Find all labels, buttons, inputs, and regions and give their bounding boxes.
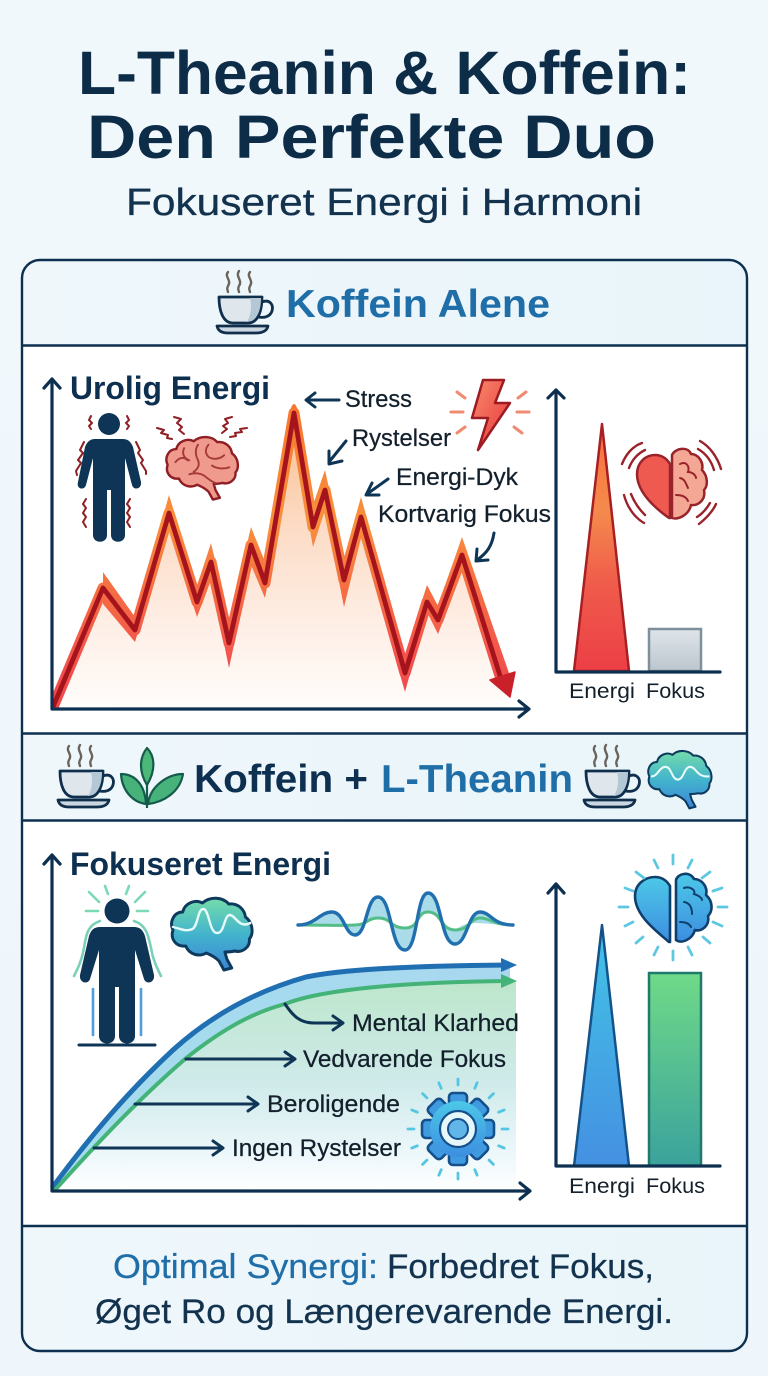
curve band between lines	[52, 965, 510, 1190]
label: vedvarende fokus	[186, 1046, 506, 1073]
red down arrow head	[490, 672, 515, 697]
icon: coffee cup	[584, 745, 639, 807]
icon: coffee cup	[217, 271, 272, 333]
icon: lightning bolt	[451, 380, 529, 450]
conclusion line 1: Optimal Synergi:	[113, 1248, 378, 1286]
icon: green leaves	[121, 748, 183, 808]
focus bar	[649, 973, 701, 1166]
label: stress	[306, 386, 412, 413]
label: vedvarende fokus: Vedvarende Fokus	[303, 1046, 506, 1073]
energy spike bar	[574, 424, 629, 671]
label: rystelser	[329, 425, 451, 464]
heading: urolig energi: Urolig Energi	[70, 370, 270, 406]
label: energi-dyk: Energi-Dyk	[396, 464, 519, 491]
gradient area under curve	[55, 981, 516, 1190]
bar chart: energy vs focus (caffeine)	[548, 390, 720, 703]
bar chart: energy vs focus (combined)	[548, 884, 720, 1198]
label: ingen rystelser	[94, 1135, 401, 1162]
icon: brain waves	[298, 893, 513, 950]
panel: koffein + l-theanin header	[58, 745, 712, 808]
label: mental klarhed: Mental Klarhed	[352, 1010, 519, 1037]
filled area under jagged line	[53, 413, 510, 708]
chart axes	[44, 379, 529, 717]
label: energi-dyk	[366, 464, 519, 495]
bar chart: energy vs focus (combined): Energi	[569, 1175, 635, 1198]
mask left overflow of the line beyond the axis	[36, 690, 51, 708]
panel: urolig energi chart	[36, 370, 721, 717]
icon: shaking person	[76, 413, 146, 542]
label: rystelser: Rystelser	[352, 425, 451, 452]
jagged energy line	[53, 404, 510, 707]
bar chart: energy vs focus (combined): Fokus	[646, 1175, 705, 1198]
title: L-Theanin & Koffein:	[78, 39, 691, 107]
green focus curve	[55, 974, 517, 1190]
conclusion line 1	[113, 1248, 654, 1286]
conclusion line 1: Forbedret Fokus,	[387, 1248, 654, 1286]
panel: conclusion	[95, 1248, 673, 1331]
blue energy curve	[52, 958, 517, 1188]
label: beroligende	[135, 1091, 400, 1118]
icon: gear	[408, 1079, 508, 1179]
panel: fokuseret energi chart	[44, 846, 727, 1199]
icon: coffee cup	[58, 745, 113, 807]
icon: heart and brain glowing	[619, 855, 727, 960]
icon: heart and brain racing	[622, 441, 721, 524]
focus bar	[649, 629, 701, 671]
bar chart: energy vs focus (caffeine): Energi	[569, 680, 635, 703]
panel: koffein alene header	[217, 271, 550, 333]
label: ingen rystelser: Ingen Rystelser	[232, 1135, 401, 1162]
main card	[22, 260, 747, 1351]
energy bar	[574, 925, 629, 1166]
label: beroligende: Beroligende	[267, 1091, 400, 1118]
chart axes	[44, 855, 530, 1199]
bar chart: energy vs focus (caffeine): Fokus	[646, 680, 705, 703]
label: stress: Stress	[345, 386, 412, 413]
icon: calm person	[74, 886, 161, 1045]
heading: koffein + l-theanin: Koffein +	[194, 758, 368, 801]
heading: koffein alene: Koffein Alene	[286, 283, 550, 326]
conclusion line 2: Øget Ro og Længerevarende Energi.	[95, 1293, 673, 1331]
label: kortvarig fokus: Kortvarig Fokus	[378, 501, 551, 528]
icon: calm brain with wave	[172, 898, 252, 970]
heading: fokuseret energi: Fokuseret Energi	[70, 846, 331, 882]
label: kortvarig fokus	[378, 501, 551, 561]
title	[78, 39, 691, 171]
icon: stressed brain	[157, 417, 247, 500]
title: Den Perfekte Duo	[87, 103, 656, 171]
label: mental klarhed	[285, 1004, 519, 1037]
icon: calm brain	[648, 751, 712, 808]
heading accent: l-theanin: L-Theanin	[381, 758, 573, 801]
subtitle: Fokuseret Energi i Harmoni	[126, 182, 642, 224]
